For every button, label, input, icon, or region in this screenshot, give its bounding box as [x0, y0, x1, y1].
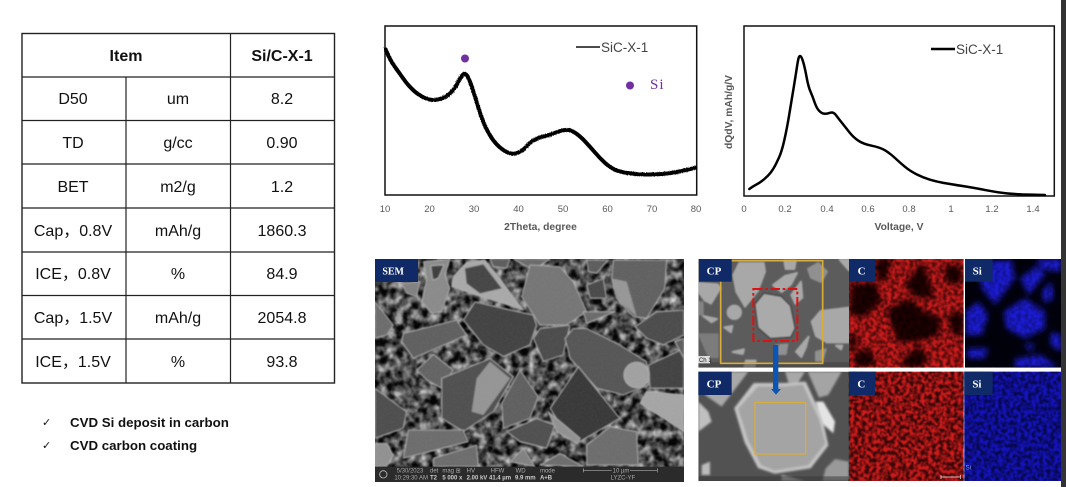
row: TD: 0.90	[266, 135, 298, 152]
Si map close-up: Si	[965, 465, 972, 472]
row: TD	[62, 135, 298, 152]
CP close-up image	[698, 372, 849, 481]
XRD x axis ticks: 80	[691, 204, 701, 215]
CP region box: yellow	[721, 261, 823, 363]
row: Cap 1.5V: 2054.8	[258, 310, 307, 327]
SEM data bar: det	[430, 468, 439, 474]
XRD x axis ticks: 70	[647, 204, 657, 215]
row: D50: D50	[58, 91, 88, 108]
SEM data bar: 41.4 µm	[489, 476, 511, 482]
panel: EDS mapping images	[698, 259, 1061, 481]
Si close-up label: Si	[972, 379, 982, 391]
XRD legend: SiC-X-1: SiC-X-1	[601, 40, 648, 55]
row: Cap 0.8V: 1860.3	[258, 223, 307, 240]
XRD x axis ticks	[380, 204, 701, 215]
row: Cap 0.8V	[34, 223, 307, 240]
dQdV x axis ticks: 0.8	[902, 204, 916, 215]
dQdV curve	[749, 56, 1045, 195]
SEM data bar: A+B	[540, 476, 553, 482]
dQdV x axis ticks: 1.4	[1026, 204, 1040, 215]
row: TD: g/cc	[163, 135, 193, 152]
dQdV x axis ticks: 0.4	[820, 204, 834, 215]
XRD x axis ticks: 20	[424, 204, 435, 215]
row: D50: 8.2	[271, 91, 293, 108]
row: ICE 0.8V: ICE，0.8V	[35, 266, 111, 283]
chart: dQ/dV curve	[724, 26, 1054, 233]
SEM data bar	[375, 467, 684, 482]
window edge strip	[1061, 0, 1066, 487]
SEM data bar: 5/30/2023	[397, 468, 424, 474]
checklist	[42, 415, 229, 453]
row: ICE 1.5V	[35, 354, 298, 371]
CP overview image	[698, 259, 849, 368]
checklist: ✓	[42, 439, 51, 452]
dQdV legend	[931, 42, 1003, 57]
XRD x axis ticks: 10	[380, 204, 390, 215]
C close-up label: C	[857, 379, 865, 391]
row: BET	[57, 179, 293, 196]
XRD x axis ticks: 40	[513, 204, 524, 215]
SEM data bar: 10 µm	[613, 468, 629, 474]
close-up region box	[755, 402, 806, 454]
row: ICE 0.8V: 84.9	[266, 266, 298, 283]
table header: Item: Item	[110, 48, 142, 65]
table header: sample: Si/C-X-1	[251, 48, 313, 65]
row: BET: BET	[57, 179, 89, 196]
C label: C	[858, 266, 866, 278]
dQdV legend: SiC-X-1	[956, 42, 1003, 57]
dQdV x axis ticks: 0	[741, 204, 747, 215]
XRD x axis ticks: 30	[469, 204, 479, 215]
SEM label: SEM	[382, 267, 405, 278]
row: ICE 0.8V	[35, 266, 298, 283]
panel: properties table	[22, 34, 334, 383]
row: TD: TD	[62, 135, 84, 152]
dQdV x axis ticks	[741, 204, 1040, 215]
CP close-up label: CP	[707, 379, 722, 391]
SEM data bar: WD	[516, 468, 526, 474]
XRD legend: Si	[626, 77, 665, 93]
row: ICE 0.8V: %	[171, 266, 185, 283]
row: Cap 1.5V: Cap，1.5V	[34, 310, 112, 327]
row: ICE 1.5V: 93.8	[266, 354, 298, 371]
row: BET: 1.2	[271, 179, 293, 196]
arrow: zoom from overview to close-up	[771, 345, 781, 395]
Si map overview	[965, 259, 1061, 368]
CP region box: red dashed	[753, 289, 797, 341]
SEM data bar: 5 000 x	[442, 476, 463, 482]
Si label: Si	[973, 266, 982, 278]
dQdV x axis title: Voltage, V	[874, 222, 924, 233]
C map close-up	[849, 372, 964, 481]
row: D50	[58, 91, 293, 108]
dQdV x axis ticks: 1	[948, 204, 954, 215]
SEM data bar: mode	[540, 468, 556, 474]
checklist: CVD Si deposit in carbon	[70, 415, 229, 430]
XRD curve	[386, 49, 695, 175]
XRD x axis ticks: 50	[558, 204, 568, 215]
row: ICE 1.5V: %	[171, 354, 185, 371]
XRD x axis ticks: 60	[602, 204, 613, 215]
C map overview	[849, 259, 964, 368]
dQdV x axis ticks: 0.6	[861, 204, 875, 215]
row: Cap 0.8V: Cap，0.8V	[34, 223, 112, 240]
XRD peak marker	[461, 54, 469, 62]
SEM data bar: 9.9 mm	[515, 476, 536, 482]
CP close-up label	[698, 372, 732, 395]
CP label: CP	[707, 266, 722, 278]
chart: XRD pattern	[380, 26, 701, 233]
SEM data bar: LYZC-YF	[611, 476, 636, 482]
XRD legend: SiC-X-1	[576, 40, 648, 55]
SEM label	[375, 259, 418, 282]
dQdV y axis title: dQdV, mAh/g/V	[724, 75, 735, 149]
CP overview image: Ch 1	[699, 358, 712, 364]
row: BET: m2/g	[160, 179, 196, 196]
SEM data bar: 2.00 kV	[467, 476, 487, 482]
row: D50: um	[167, 91, 189, 108]
SEM data bar: HFW	[491, 468, 505, 474]
Si map close-up	[964, 372, 1061, 481]
row: Cap 0.8V: mAh/g	[155, 223, 201, 240]
SEM data bar: HV	[467, 468, 475, 474]
row: Cap 1.5V	[34, 310, 307, 327]
SEM data bar: mag ⊞	[442, 468, 461, 474]
checklist: CVD carbon coating	[70, 438, 197, 453]
XRD x axis title: 2Theta, degree	[504, 222, 577, 233]
panel: SEM image	[375, 259, 684, 482]
row: ICE 1.5V: ICE，1.5V	[35, 354, 111, 371]
checklist: ✓	[42, 416, 51, 429]
SEM data bar: T2	[430, 476, 438, 482]
row: Cap 1.5V: mAh/g	[155, 310, 201, 327]
SEM data bar: 10:29:30 AM	[394, 476, 428, 482]
dQdV x axis ticks: 0.2	[778, 204, 792, 215]
CP label	[699, 259, 732, 282]
dQdV x axis ticks: 1.2	[985, 204, 999, 215]
XRD legend: Si: Si	[650, 77, 665, 93]
